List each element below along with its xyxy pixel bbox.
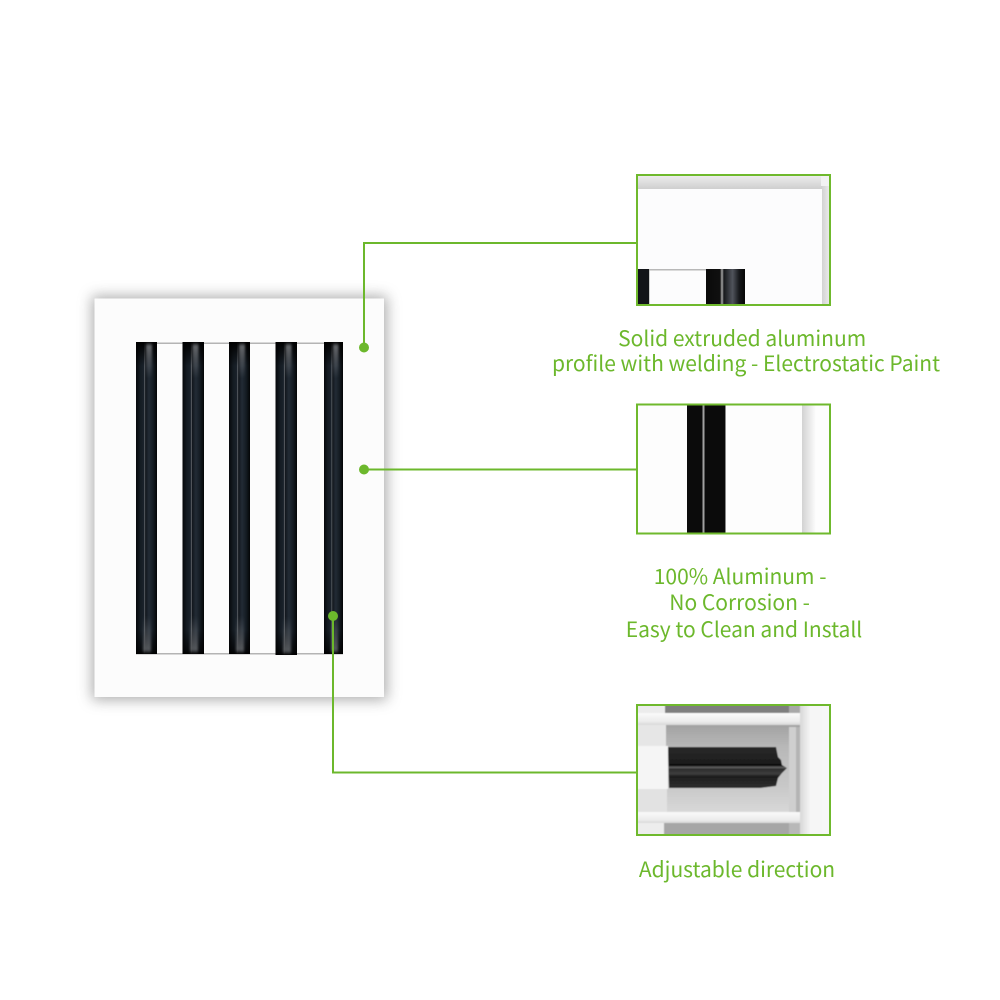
connector: top callout: [359, 243, 637, 352]
text: material caption: Easy to Clean and Install: [626, 614, 862, 644]
connector: middle callout: [359, 464, 637, 474]
slot bar 2: [182, 342, 204, 654]
slot bar 5: [324, 342, 343, 654]
text: aluminum profile caption: Solid extruded aluminum: [618, 323, 866, 353]
text: material caption: 100% Aluminum -: [654, 561, 826, 591]
text: material caption: No Corrosion -: [669, 587, 810, 617]
connector: bottom callout: [328, 611, 637, 772]
inset: adjustable blade photo: [636, 704, 831, 836]
slot bar 3: [229, 342, 250, 654]
text: adjustable direction caption: Adjustable direction: [639, 854, 835, 884]
inset: frame corner detail: [637, 175, 830, 306]
panel: vent grille product: [92, 296, 387, 700]
slot bar 1: [136, 342, 157, 654]
inset: slot close-up: [637, 404, 830, 534]
text: aluminum profile caption: profile with welding - Electrostatic Paint: [552, 348, 940, 378]
slot bar 4: [276, 342, 297, 655]
